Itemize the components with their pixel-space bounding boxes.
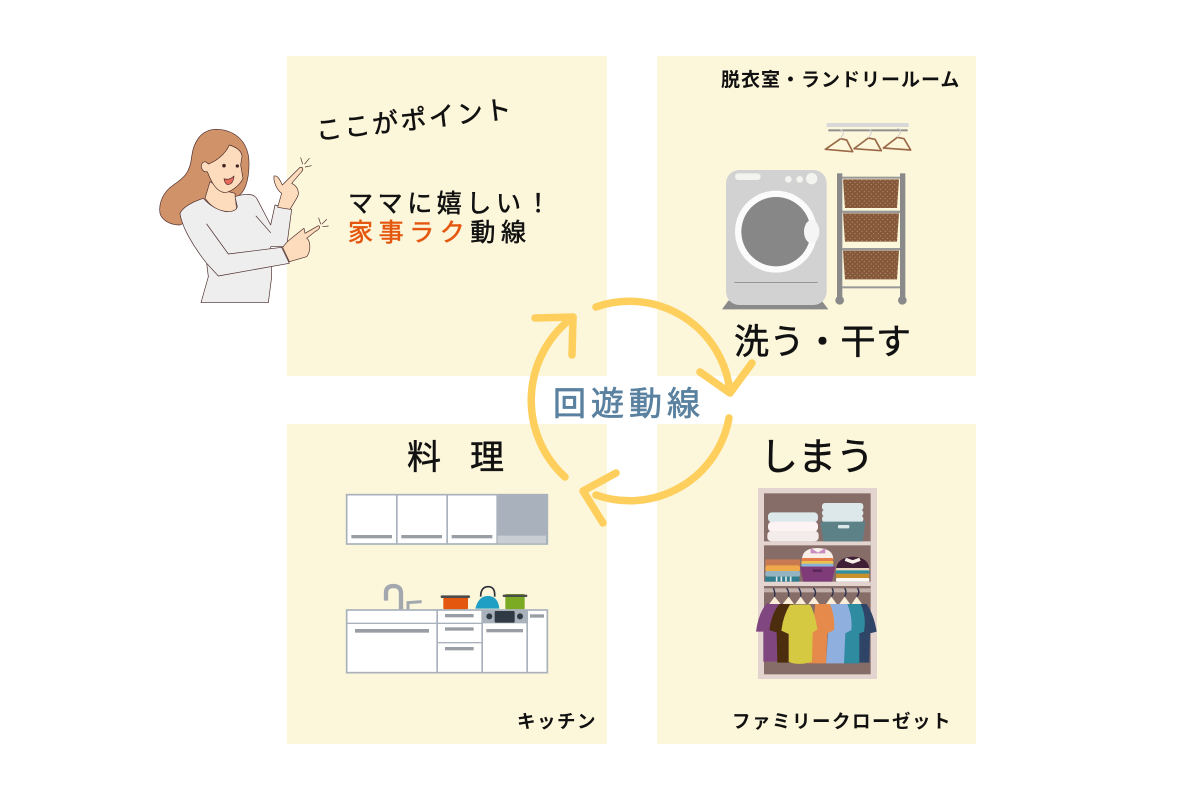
center label: 回遊動線 [553, 385, 705, 422]
panel: kitchen [287, 424, 607, 744]
panel: point [287, 56, 607, 376]
icon: woman pointing [160, 129, 328, 303]
arrow: cycle [531, 301, 752, 523]
arrow: bottom [583, 418, 729, 523]
heading: cooking: 料理 [407, 439, 504, 477]
panel: closet [657, 424, 976, 744]
text block: message: 家事ラク動線 [348, 219, 532, 247]
label: family closet: ファミリークローゼット [732, 711, 952, 732]
text block: message: ママに嬉しい！ [348, 190, 555, 218]
label: kitchen: キッチン [517, 711, 597, 732]
icon: wall cabinets [347, 495, 547, 544]
icon: family closet [756, 488, 877, 679]
icon: laundry rack [835, 173, 907, 305]
heading: put away: しまう [760, 437, 874, 479]
label: laundry room: 脱衣室・ランドリールーム [721, 69, 960, 91]
arrow: left [531, 317, 573, 477]
icon: kitchen counter [347, 586, 547, 673]
arrow: top right [596, 301, 752, 393]
heading: point: ここがポイント [314, 94, 515, 146]
heading: wash and dry: 洗う・干す [734, 323, 912, 362]
folded stacks top [768, 512, 818, 522]
icon: washing machine [722, 170, 828, 309]
text block: message [348, 190, 555, 247]
icon: hanger rail [825, 123, 911, 152]
folded stacks middle [765, 559, 800, 566]
panel: laundry [657, 56, 976, 376]
hanging shirts [756, 603, 787, 662]
